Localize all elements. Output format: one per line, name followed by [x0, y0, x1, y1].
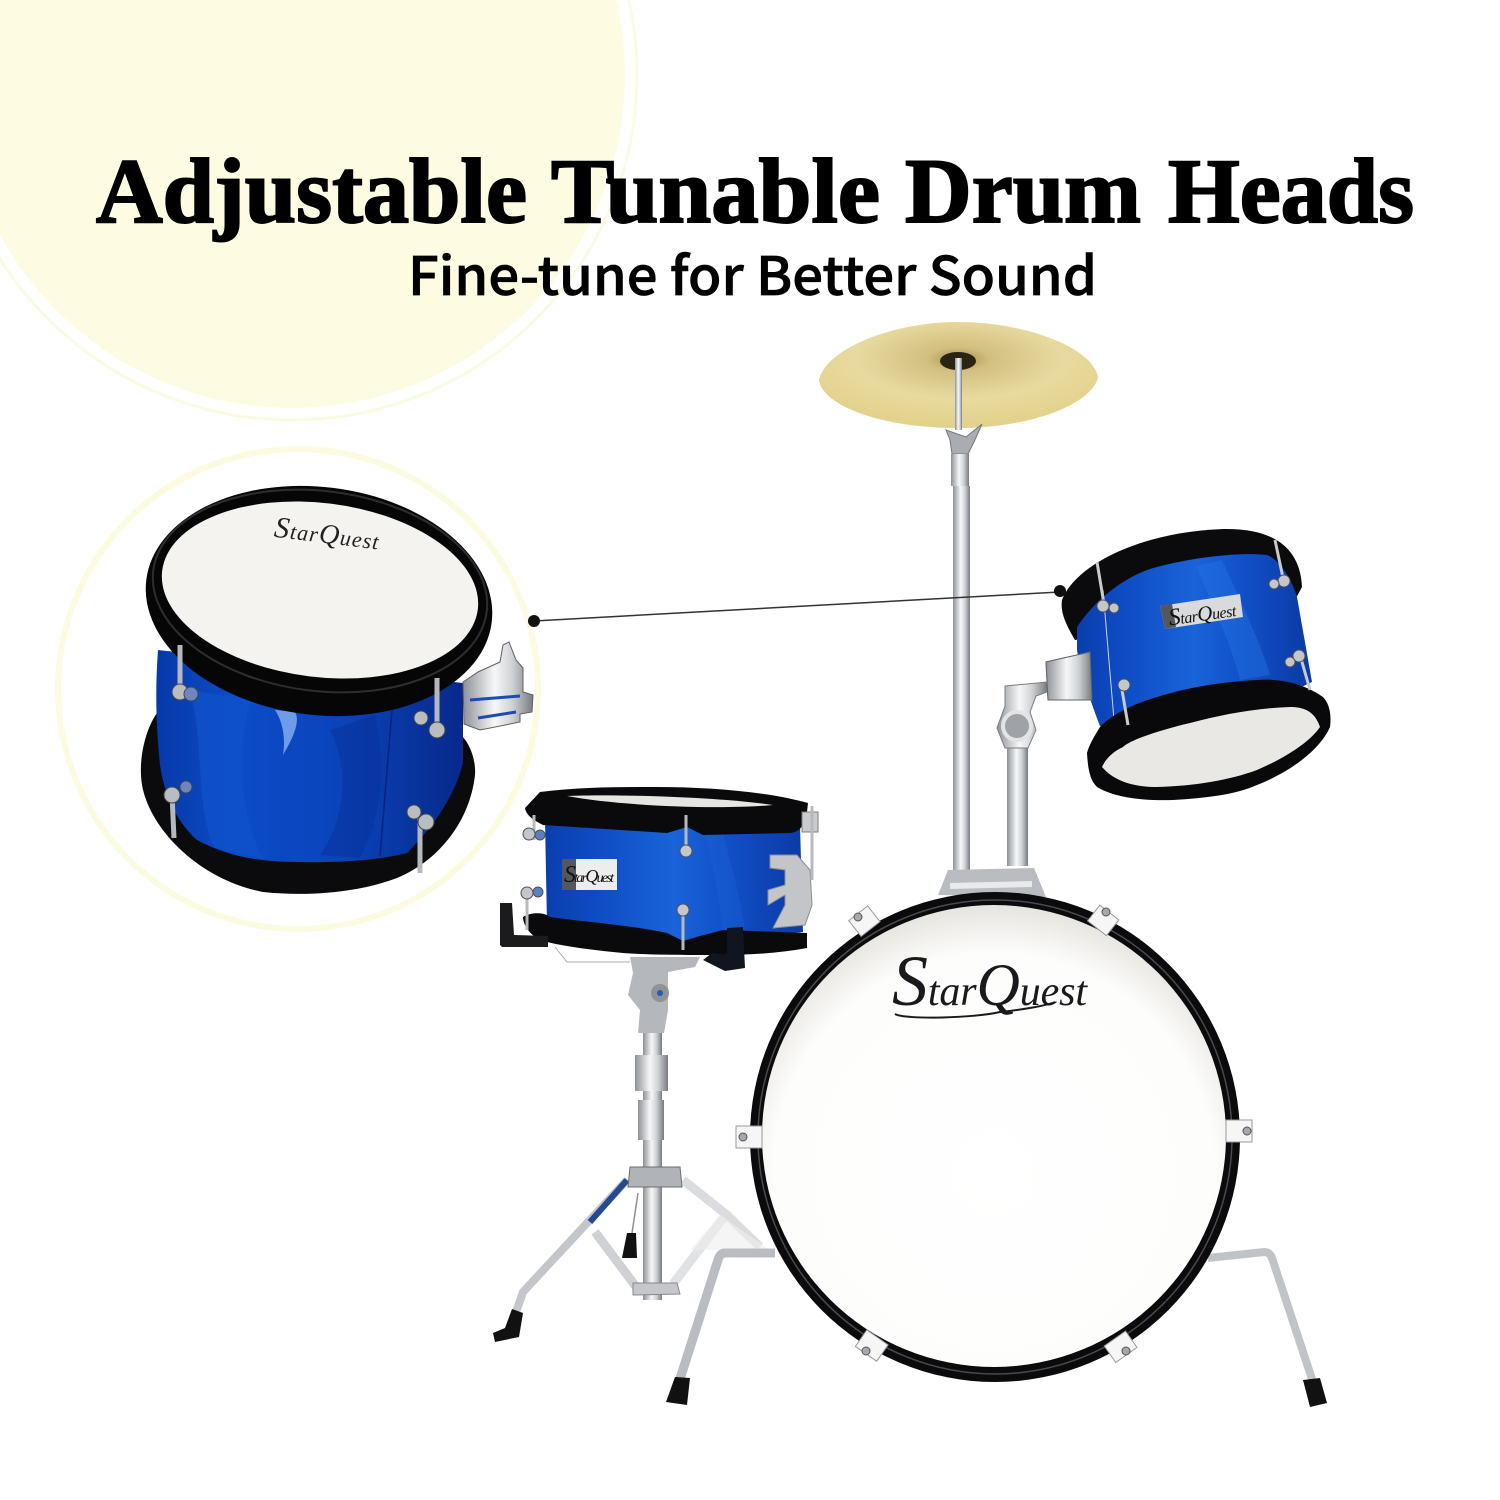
shell — [545, 820, 803, 945]
title: Drum — [905, 140, 1141, 242]
top hoop — [525, 787, 808, 835]
leader line — [528, 585, 1066, 627]
top hoop — [132, 467, 506, 735]
icon: tom arm mount — [938, 652, 1092, 897]
icon: small tom drum — [1046, 529, 1331, 800]
bottom hoop — [141, 713, 475, 894]
snare head — [567, 795, 773, 807]
drum head logo: StarQuest — [273, 511, 382, 556]
tom mount — [463, 642, 533, 730]
bass drum claws — [736, 905, 1252, 1362]
strainer — [768, 855, 812, 928]
shell — [1077, 554, 1312, 735]
icon: zoomed tom drum — [132, 467, 533, 894]
bottom hoop — [1087, 680, 1331, 800]
lugs — [172, 645, 437, 873]
icon: snare stand — [493, 957, 770, 1342]
drum head — [152, 484, 488, 696]
title: Heads — [1168, 140, 1414, 242]
icon: bass drum legs — [666, 1252, 1327, 1407]
top hoop back — [1062, 529, 1302, 640]
icon: snare drum — [500, 787, 818, 971]
title: Adjustable — [96, 140, 527, 242]
bass drum logo: StarQuest — [892, 941, 1088, 1021]
icon: cymbal — [819, 322, 1098, 454]
stand feet — [493, 1309, 523, 1342]
background circle — [0, 0, 637, 420]
callout circle — [58, 449, 538, 929]
lugs — [527, 806, 812, 950]
right leg — [683, 1180, 760, 1247]
tom mount collar — [1046, 652, 1092, 700]
title: Tunable — [551, 140, 880, 242]
bottom hoop — [523, 913, 807, 955]
snare badge: StarQuest — [564, 862, 615, 888]
shell — [156, 650, 463, 862]
icon: bass drum — [736, 892, 1252, 1382]
lugs — [1097, 540, 1310, 725]
icon: cymbal stand — [951, 454, 970, 871]
snare clips — [500, 903, 548, 947]
left leg — [516, 1180, 627, 1312]
tom badge: StarQuest — [1167, 596, 1238, 631]
subtitle: Fine-tune for Better Sound — [408, 235, 1097, 311]
bottom drum head — [1102, 707, 1320, 787]
